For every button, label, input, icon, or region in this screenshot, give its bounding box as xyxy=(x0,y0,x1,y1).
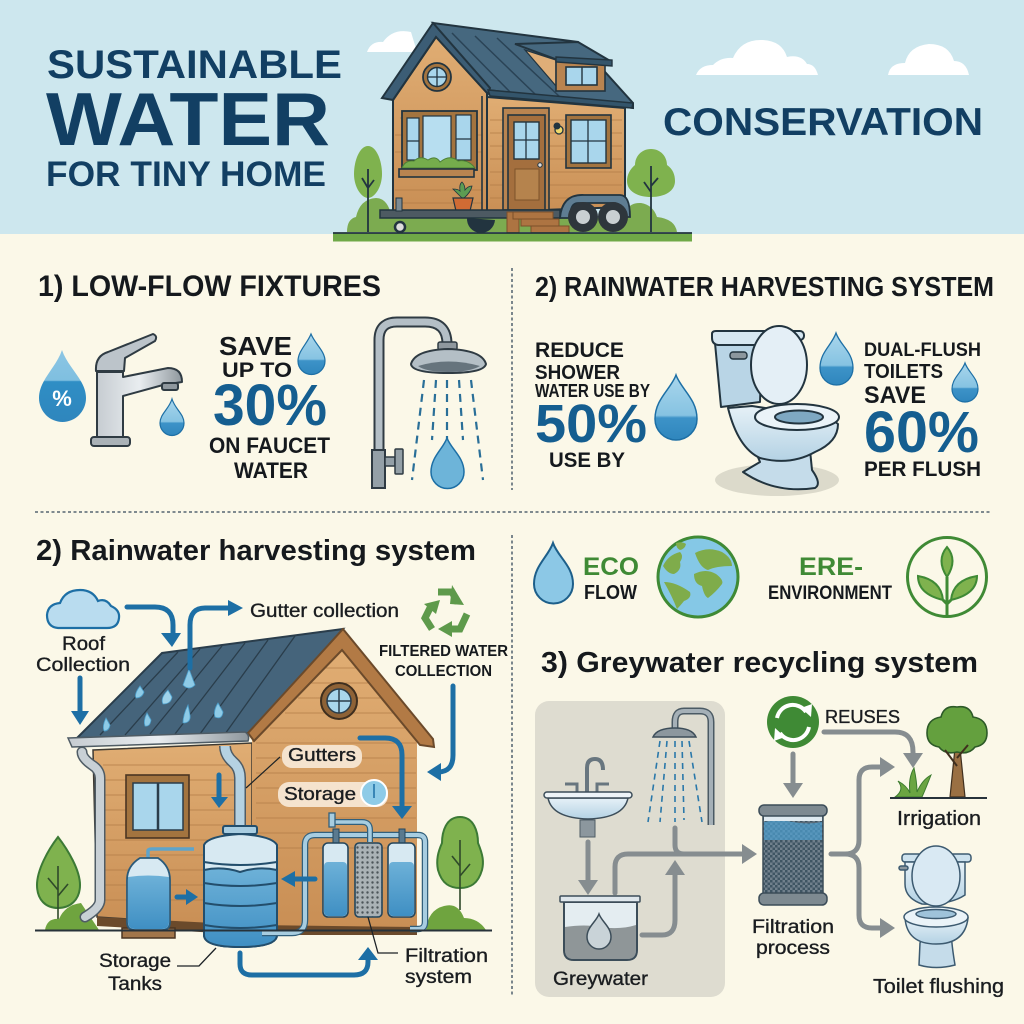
entry steps xyxy=(507,212,569,233)
label: roof collection: Collection xyxy=(36,655,130,676)
icon: globe xyxy=(658,537,738,617)
heading: 1) LOW-FLOW FIXTURES xyxy=(38,270,381,303)
stat: reduce shower water 50%: SHOWER xyxy=(535,362,621,384)
grey sources panel xyxy=(535,701,725,997)
callout: storage: Storage xyxy=(284,784,356,804)
stat: dual flush 60% xyxy=(864,340,981,481)
icon: water drop xyxy=(655,375,697,440)
label: filtration process: process xyxy=(756,938,830,959)
icon: drop by toilet xyxy=(820,333,853,385)
label: filtration process xyxy=(752,917,834,959)
ground line xyxy=(35,930,492,932)
callout: storage xyxy=(278,780,388,807)
trailer frame xyxy=(380,198,560,233)
label: storage tanks: Storage xyxy=(99,951,171,972)
label: eco flow: FLOW xyxy=(584,582,637,604)
eco badges row xyxy=(534,537,986,617)
stat: reduce shower water 50%: REDUCE xyxy=(535,339,624,362)
stat: save up to 30%: UP TO xyxy=(222,359,292,382)
round window xyxy=(321,683,357,719)
tree left xyxy=(37,837,80,930)
stat: save up to 30% xyxy=(209,331,331,483)
label: filtration system xyxy=(368,917,488,988)
icon: greywater tank xyxy=(560,896,640,960)
grey flow arrows xyxy=(578,732,923,938)
bushes behind house xyxy=(347,198,677,232)
icon: leaf badge xyxy=(908,538,986,617)
callout: gutters: Gutters xyxy=(288,745,356,765)
wall lamp xyxy=(554,122,563,134)
roof xyxy=(433,23,633,108)
label: roof collection: Roof xyxy=(62,634,106,655)
ground strip xyxy=(333,233,692,242)
icon: cloud xyxy=(47,590,119,628)
label: irrigation: Irrigation xyxy=(897,808,981,830)
tree right xyxy=(437,817,483,910)
label: greywater: Greywater xyxy=(553,969,649,990)
left tree xyxy=(354,146,382,232)
title: FOR TINY HOME xyxy=(46,155,326,194)
title xyxy=(46,43,342,194)
label: storage tanks xyxy=(99,948,216,995)
dormer xyxy=(515,42,612,91)
icon: filtration cylinder xyxy=(759,805,827,905)
icon: eco drop xyxy=(534,543,573,604)
label: reuses: REUSES xyxy=(825,707,900,727)
label: toilet flushing: Toilet flushing xyxy=(873,976,1004,998)
label: eco flow: ECO xyxy=(583,553,639,581)
icon: toilet xyxy=(899,846,971,968)
callout: gutters xyxy=(246,745,362,788)
label: storage tanks: Tanks xyxy=(108,974,162,995)
walls xyxy=(393,37,487,212)
heading: 2) Rainwater harvesting system xyxy=(36,535,476,567)
stat: dual flush 60%: DUAL-FLUSH xyxy=(864,340,981,361)
front door xyxy=(503,108,549,210)
stat: dual flush 60%: PER FLUSH xyxy=(864,458,981,481)
icon: small drop xyxy=(160,399,184,436)
bay window xyxy=(402,111,477,170)
icon: grass and tree xyxy=(890,707,987,798)
stat: dual flush 60%: TOILETS xyxy=(864,361,943,383)
raindrops on roof xyxy=(103,669,223,731)
stat: reduce shower water 50% xyxy=(535,339,650,472)
label: filtration system: Filtration xyxy=(405,946,488,967)
icon: sink xyxy=(544,759,632,837)
panel: rainwater harvesting diagram xyxy=(35,535,508,995)
label: ere-environment: ERE- xyxy=(799,553,863,581)
stat: save up to 30%: 30% xyxy=(213,373,327,438)
stat: dual flush 60%: SAVE xyxy=(864,382,926,409)
heading: conservation: CONSERVATION xyxy=(663,101,983,144)
icon: recycling symbol xyxy=(424,585,467,637)
potted plant xyxy=(453,182,473,211)
label: ere-environment xyxy=(768,553,892,604)
house roof xyxy=(77,629,434,747)
square window xyxy=(126,775,189,838)
icon: reuse badge xyxy=(767,696,819,748)
small storage tank xyxy=(122,849,194,938)
stat: save up to 30%: SAVE xyxy=(219,331,292,361)
stat: reduce shower water 50%: 50% xyxy=(535,394,647,454)
title: SUSTAINABLE xyxy=(47,43,342,87)
round window xyxy=(423,63,451,91)
title: WATER xyxy=(46,77,330,161)
panel: greywater recycling xyxy=(535,647,1004,998)
stat: reduce shower water 50%: USE BY xyxy=(549,449,625,472)
stat: save up to 30%: ON FAUCET xyxy=(209,433,331,458)
main storage tank xyxy=(204,826,277,947)
icon: shower xyxy=(372,322,486,489)
label: filtered water collection xyxy=(379,643,508,680)
label: filtered water collection: COLLECTION xyxy=(395,663,492,680)
label: filtration process: Filtration xyxy=(752,917,834,938)
illustration: tiny house on trailer xyxy=(333,23,692,242)
filtration unit xyxy=(262,813,425,933)
stat: reduce shower water 50%: WATER USE BY xyxy=(535,381,650,401)
icon: faucet xyxy=(91,334,182,446)
icon: percent drop xyxy=(39,350,86,422)
heading: 3) Greywater recycling system xyxy=(541,647,978,679)
clouds in header xyxy=(367,31,969,75)
blue flow arrows xyxy=(71,600,453,975)
dashed dividers xyxy=(35,511,990,513)
gutter xyxy=(68,732,249,917)
panel: low-flow fixtures xyxy=(38,270,486,489)
icon: toilet xyxy=(712,326,839,496)
bushes xyxy=(45,903,486,930)
trailer wheels and fender xyxy=(560,195,630,232)
house walls xyxy=(93,650,417,935)
panel: rainwater harvesting stats xyxy=(535,271,994,496)
side window xyxy=(566,115,611,168)
icon: shower xyxy=(648,711,711,825)
header sky band xyxy=(0,0,1024,234)
icon: percent drop: % xyxy=(52,386,72,411)
label: gutter collection: Gutter collection xyxy=(250,601,399,622)
label: filtration system: system xyxy=(405,967,472,988)
stat: dual flush 60%: 60% xyxy=(864,400,979,465)
label: ere-environment: ENVIRONMENT xyxy=(768,583,892,604)
label: roof collection xyxy=(36,634,130,676)
right tree xyxy=(627,149,675,232)
stat: save up to 30%: WATER xyxy=(234,458,308,483)
label: eco flow xyxy=(583,553,639,604)
window flower box xyxy=(399,158,475,177)
label: filtered water collection: FILTERED WATER xyxy=(379,643,508,660)
